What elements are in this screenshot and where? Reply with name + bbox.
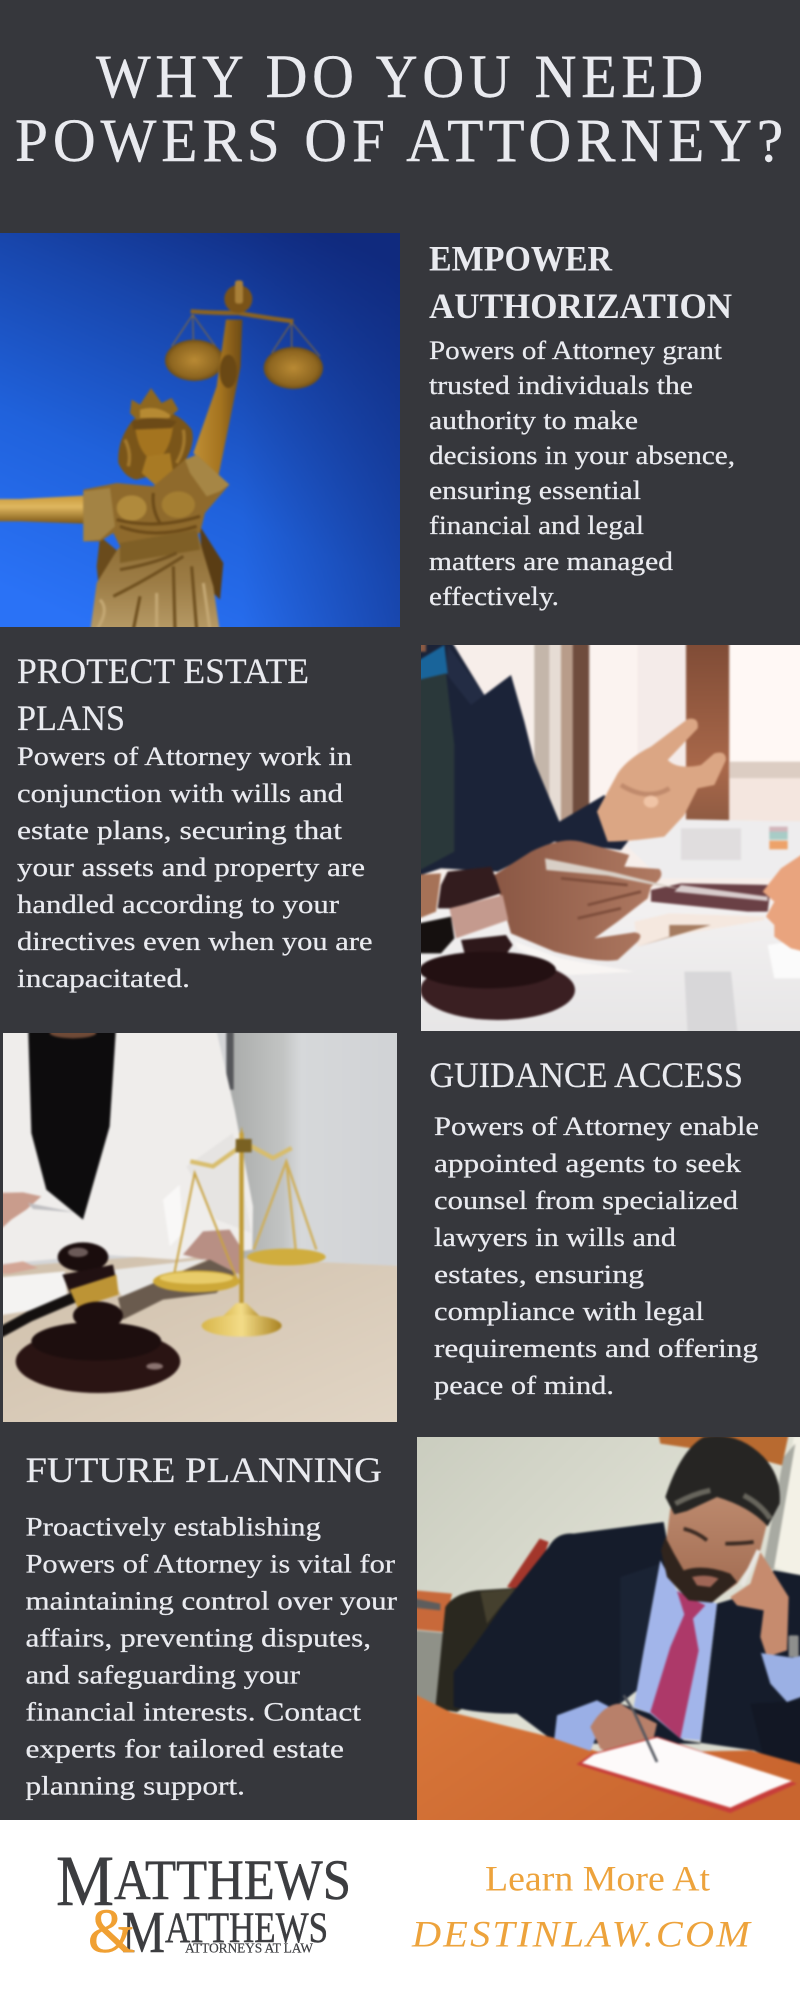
text: guidance access body: Powers of Attorney enable [434,1112,759,1141]
black top [28,1023,116,1220]
arm left [0,496,85,524]
hand at ear [730,1552,789,1657]
text: future planning body: Powers of Attorney is vital for [26,1550,395,1578]
text: empower authorization body: authority to make [429,406,638,435]
logo: Matthews & Matthews: M [122,1899,165,1965]
left hand and pen [3,1191,42,1229]
call to action: learn more: Learn More At [485,1858,710,1898]
title: POWERS OF ATTORNEY? [15,108,788,175]
heading: protect estate plans: PLANS [17,698,125,738]
heading: empower authorization [429,238,732,326]
gavel head [58,1242,108,1272]
text: future planning body: maintaining control over your [26,1586,397,1616]
sleeve cuff [554,1700,609,1751]
lower hand [494,840,661,961]
table [0,1255,407,1433]
heading: empower authorization: EMPOWER [429,238,613,278]
stacked books [651,883,771,912]
scale base [223,1302,260,1317]
text: future planning body: affairs, preventing disputes, [26,1624,371,1652]
text: guidance access body [434,1112,759,1400]
notebook [576,1736,797,1813]
text: future planning body: and safeguarding your [26,1660,300,1690]
left shelf [407,1590,452,1632]
image: lawyer writing on phone [407,1427,800,1830]
logo: Matthews & Matthews: ATTHEWS [114,1849,351,1912]
jacket [0,1023,253,1265]
writing hand [590,1704,657,1760]
text: protect estate plans body: estate plans, securing that [17,816,343,845]
heading: protect estate plans: PROTECT ESTATE [17,651,309,691]
text: empower authorization body: effectively. [429,582,559,611]
suit [454,1522,800,1770]
text: guidance access body: lawyers in wills and [434,1223,676,1252]
beam [190,1146,292,1166]
call to action: learn more [411,1858,752,1956]
image: lawyers gesturing with gavel [411,635,800,1042]
paper and clipboard [0,1271,68,1316]
text: protect estate plans body [17,742,372,993]
hair [665,1436,780,1526]
table [407,1694,800,1830]
text: protect estate plans body: handled according to your [17,890,339,919]
logo: Matthews & Matthews: & [88,1898,135,1966]
dress [90,530,220,633]
text: empower authorization body [429,336,735,611]
right hand [183,1230,240,1275]
text: future planning body: experts for tailored estate [26,1734,344,1764]
gavel handle [0,1296,76,1336]
face [665,1494,767,1600]
title: WHY DO YOU NEED [96,44,708,111]
window strip [774,1437,800,1580]
gavel base [14,1340,182,1395]
folder [634,913,764,947]
text: protect estate plans body: Powers of Attorney work in [17,742,352,771]
heading: guidance access: GUIDANCE ACCESS [430,1055,743,1095]
right cuff [761,1653,800,1702]
footer band [0,1820,800,2000]
left scale pan [173,1173,236,1280]
text: guidance access body: compliance with legal [434,1297,704,1326]
text: future planning body: planning support. [26,1772,245,1800]
logo: Matthews & Matthews: ATTORNEYS AT LAW [185,1940,313,1956]
text: empower authorization body: financial and legal [429,511,644,540]
text: future planning body [26,1512,397,1800]
title [15,44,788,175]
image: lady justice statue [0,223,410,637]
cloak [200,526,223,600]
tie [650,1591,705,1739]
scale strings [172,315,320,356]
shirt [634,1560,717,1740]
pen [545,858,683,889]
logo: Matthews & Matthews: M [56,1841,114,1921]
chair [435,1588,520,1712]
torso [83,455,229,553]
window frames and curtains [533,645,550,797]
text: protect estate plans body: conjunction with wills and [17,779,343,808]
text: guidance access body: appointed agents to seek [434,1149,741,1178]
text: protect estate plans body: directives even when you are [17,927,372,956]
text: future planning body: financial interests. Contact [26,1698,362,1726]
red binder [507,1539,549,1592]
heading: future planning: FUTURE PLANNING [26,1450,382,1490]
text: empower authorization body: ensuring essential [429,476,641,505]
upper hand [597,719,726,842]
heading: protect estate plans [17,651,309,738]
call to action: learn more: DESTINLAW.COM [411,1914,752,1956]
book [626,819,800,878]
table [421,946,800,1031]
face [135,427,174,457]
text: protect estate plans body: incapacitated. [17,964,190,993]
phone [742,1550,759,1585]
text: guidance access body: requirements and offering [434,1334,758,1363]
gavel [421,915,456,956]
text: empower authorization body: trusted individuals the [429,371,693,400]
shelf top [658,1437,790,1466]
heading: empower authorization: AUTHORIZATION [429,286,732,326]
text: guidance access body: counsel from specialized [434,1186,738,1215]
hair [118,410,193,480]
logo: Matthews & Matthews: ATTHEWS [165,1905,328,1952]
logo: Matthews & Matthews [56,1841,351,1966]
wrist cuff [421,872,442,920]
right hand [763,848,800,953]
text: empower authorization body: matters are managed [429,547,673,576]
beard [661,1537,737,1603]
pole [239,1133,244,1306]
suit [421,645,630,876]
pen [624,1695,657,1762]
text: empower authorization body: decisions in your absence, [429,441,735,470]
text: guidance access body: peace of mind. [434,1371,614,1400]
eyes and brows [684,1529,754,1544]
crown [130,388,178,423]
text: future planning body: Proactively establishing [26,1512,321,1542]
right scale pan [254,1161,316,1250]
text: protect estate plans body: your assets and property are [17,853,365,882]
text: guidance access body: estates, ensuring [434,1260,644,1289]
text: empower authorization body: Powers of Attorney grant [429,336,723,365]
image: woman with scales and gavel [0,1023,407,1433]
